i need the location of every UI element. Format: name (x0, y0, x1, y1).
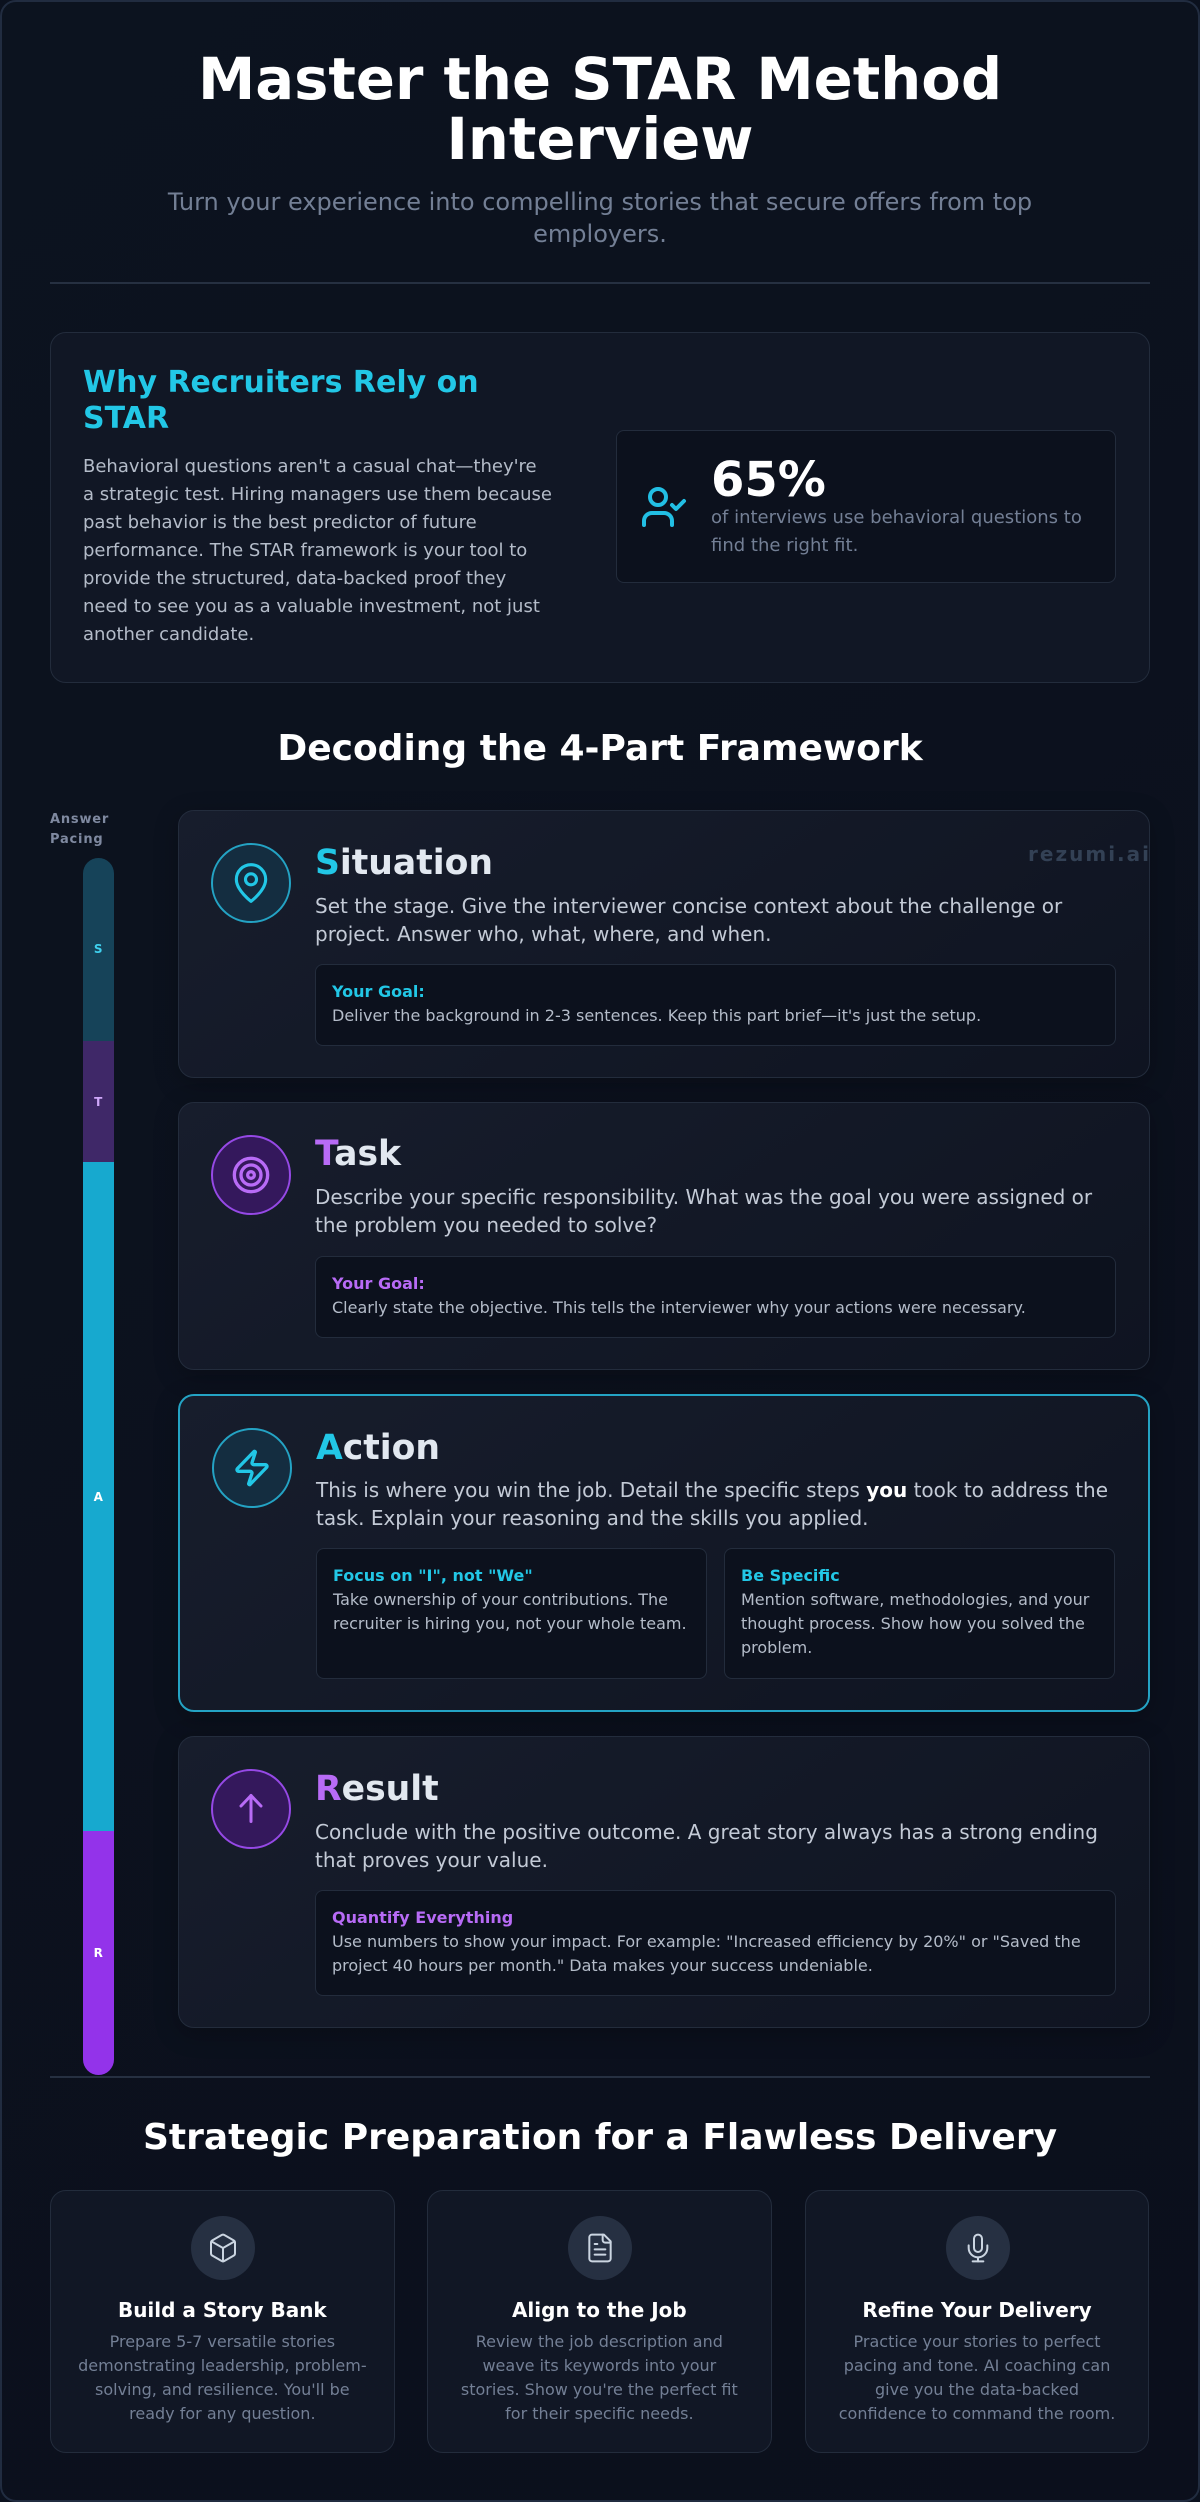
action description: task. Explain your reasoning and the skills you applied. (316, 1506, 869, 1530)
icon: microphone (946, 2216, 1010, 2280)
tip label: Focus on "I", not "We" (333, 1566, 533, 1585)
segment S: S (94, 942, 103, 956)
card text: demonstrating leadership, problem- (78, 2356, 367, 2375)
tip box: focus on I (316, 1548, 707, 1679)
icon: arrow up (211, 1769, 291, 1849)
icon: box (191, 2216, 255, 2280)
segment T: T (94, 1094, 102, 1108)
pacing bar (83, 858, 114, 2075)
card title: Align to the Job (512, 2298, 687, 2322)
situation description: Set the stage. Give the interviewer concise context about the challenge or (315, 894, 1062, 918)
card text: ready for any question. (129, 2404, 316, 2423)
card text: solving, and resilience. You'll be (95, 2380, 350, 2399)
panel body text: Behavioral questions aren't a casual chat—they're (83, 456, 537, 477)
icon: map pin (211, 843, 291, 923)
panel body text: a strategic test. Hiring managers use them because (83, 484, 552, 505)
card title: Refine Your Delivery (862, 2298, 1092, 2322)
task description (315, 1185, 1092, 1237)
situation description: project. Answer who, what, where, and when. (315, 922, 771, 946)
action description (316, 1478, 1108, 1530)
task title: Task (315, 1134, 401, 1174)
card text: for their specific needs. (505, 2404, 694, 2423)
tip text (741, 1590, 1090, 1657)
tip text: recruiter is hiring you, not your whole team. (333, 1614, 687, 1633)
action title: Action (316, 1428, 440, 1468)
task goal box (315, 1256, 1116, 1338)
card: build a story bank (50, 2190, 395, 2453)
panel body text: past behavior is the best predictor of future (83, 512, 477, 533)
card text (78, 2332, 367, 2423)
card text (461, 2332, 738, 2423)
segment T (82, 1040, 114, 1162)
lower divider (50, 2076, 1150, 2078)
panel body text: need to see you as a valuable investment, not just (83, 596, 540, 617)
card: result (178, 1736, 1150, 2028)
tip text: problem. (741, 1638, 812, 1657)
subtitle: employers. (533, 220, 667, 248)
title: Interview (446, 106, 753, 173)
card: situation (178, 810, 1150, 1078)
task description: Describe your specific responsibility. What was the goal you were assigned or (315, 1185, 1092, 1209)
stat number: 65% (711, 452, 826, 508)
panel heading: Why Recruiters Rely on (83, 365, 479, 400)
quantify label: Quantify Everything (332, 1908, 513, 1927)
section heading: framework: Decoding the 4-Part Framework (277, 728, 923, 769)
segment R (82, 1831, 114, 2075)
card text: Prepare 5-7 versatile stories (110, 2332, 335, 2351)
segment A (82, 1162, 114, 1831)
stat caption: of interviews use behavioral questions to (711, 507, 1082, 528)
icon: user check (642, 487, 686, 527)
stat box: 65% (616, 430, 1116, 583)
segment R: R (94, 1946, 103, 1960)
icon: target (211, 1135, 291, 1215)
goal label: Your Goal: (332, 1274, 425, 1293)
stat caption (711, 507, 1082, 556)
quantify text (332, 1932, 1081, 1975)
tip text: Take ownership of your contributions. The (333, 1590, 668, 1609)
panel heading: STAR (83, 401, 169, 436)
card text: Review the job description and (476, 2332, 723, 2351)
pacing label: Pacing (50, 832, 103, 847)
tip label: Be Specific (741, 1566, 840, 1585)
quantify text: Use numbers to show your impact. For example: "Increased efficiency by 20%" or "Saved the (332, 1932, 1081, 1951)
situation description (315, 894, 1062, 946)
card: align to the job (427, 2190, 772, 2453)
pacing label (50, 812, 109, 847)
goal text: Clearly state the objective. This tells the interviewer why your actions were necessary. (332, 1298, 1026, 1317)
watermark: rezumi.ai (1028, 842, 1151, 866)
result description: that proves your value. (315, 1848, 548, 1872)
segment S (82, 858, 114, 1040)
subtitle (168, 188, 1032, 248)
card: action (178, 1394, 1150, 1712)
section heading: preparation: Strategic Preparation for a Flawless Delivery (143, 2117, 1057, 2158)
result title: Result (315, 1769, 439, 1809)
segment A: A (94, 1490, 103, 1504)
card: task (178, 1102, 1150, 1370)
card text (839, 2332, 1115, 2423)
icon: lightning bolt (212, 1428, 292, 1508)
task description: the problem you needed to solve? (315, 1213, 657, 1237)
panel body text: another candidate. (83, 624, 254, 645)
panel heading (83, 365, 479, 436)
card text: Practice your stories to perfect (854, 2332, 1101, 2351)
stat caption: find the right fit. (711, 535, 858, 556)
subtitle: Turn your experience into compelling stories that secure offers from top (168, 188, 1032, 216)
situation title: Situation (315, 843, 493, 883)
tip text: Mention software, methodologies, and your (741, 1590, 1089, 1609)
quantify box (315, 1890, 1116, 1996)
result description: Conclude with the positive outcome. A great story always has a strong ending (315, 1820, 1098, 1844)
goal label: Your Goal: (332, 982, 425, 1001)
panel body text: provide the structured, data-backed proof they (83, 568, 506, 589)
pacing label: Answer (50, 812, 109, 827)
panel: why recruiters rely on STAR (50, 332, 1150, 683)
result description (315, 1820, 1098, 1872)
card title: Build a Story Bank (118, 2298, 327, 2322)
card text: confidence to command the room. (839, 2404, 1115, 2423)
quantify text: project 40 hours per month." Data makes your success undeniable. (332, 1956, 873, 1975)
card: refine your delivery (805, 2190, 1149, 2453)
action description: This is where you win the job. Detail the specific steps you took to address the (316, 1478, 1108, 1502)
card text: give you the data-backed (875, 2380, 1079, 2399)
goal text: Deliver the background in 2-3 sentences. Keep this part brief—it's just the setup. (332, 1006, 981, 1025)
title: Master the STAR Method (198, 46, 1002, 113)
card text: stories. Show you're the perfect fit (461, 2380, 738, 2399)
situation goal box (315, 964, 1116, 1046)
panel body text (83, 456, 552, 645)
card text: pacing and tone. AI coaching can (844, 2356, 1110, 2375)
header divider (50, 282, 1150, 284)
title (198, 46, 1002, 173)
icon: document (568, 2216, 632, 2280)
tip text (332, 1590, 687, 1633)
card text: weave its keywords into your (482, 2356, 716, 2375)
panel body text: performance. The STAR framework is your tool to (83, 540, 527, 561)
tip text: thought process. Show how you solved the (741, 1614, 1085, 1633)
tip box: be specific (724, 1548, 1115, 1679)
